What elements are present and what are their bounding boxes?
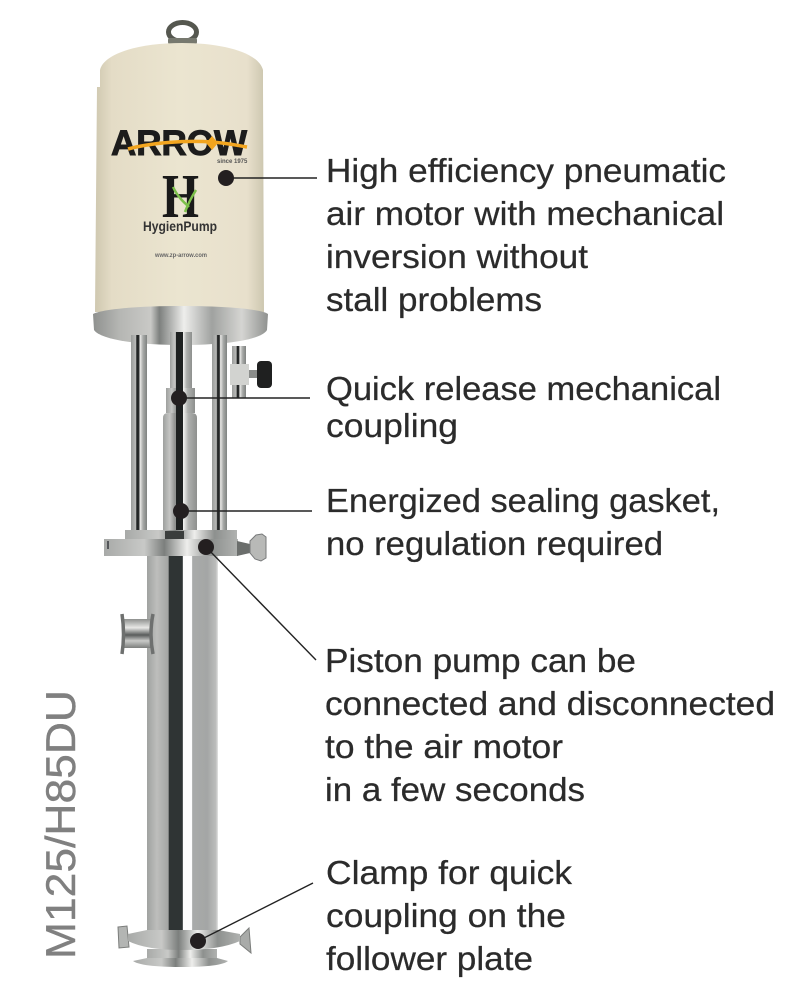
leader lines and dots [171,170,317,949]
callout: piston pump: Piston pump can be [325,642,636,679]
lifting eyelet [168,22,197,44]
callout: piston pump: to the air motor [325,728,563,765]
callout: coupling [326,370,721,444]
logo: Arrow: since 1975 [217,159,248,165]
logo: HygienPump [143,163,217,259]
valve and knob [230,346,272,398]
tie rods [131,335,227,531]
callout: gasket [326,482,720,562]
model name: M125/H85DU [37,690,84,959]
callout: air motor [326,152,726,318]
logo: HygienPump: www.zp-arrow.com [154,253,207,259]
air motor cylinder [95,43,264,312]
callout: air motor: stall problems [326,281,542,318]
side port [122,614,153,654]
motor base ring [93,306,268,345]
clamp flange [104,534,266,561]
callout: clamp [326,854,573,977]
logo: HygienPump: H [162,163,199,231]
upper plate [125,530,237,540]
coupling and piston rod [163,332,197,531]
callout: piston pump [325,642,775,808]
callout: clamp: Clamp for quick [326,854,573,891]
main pump tube [147,555,218,934]
logo: Arrow: ARROW [111,124,247,163]
callout: air motor: High efficiency pneumatic [326,152,726,189]
callout: piston pump: in a few seconds [325,771,585,808]
logo: HygienPump: HygienPump [143,218,217,234]
callout: air motor: air motor with mechanical [326,195,724,232]
callout: clamp: coupling on the [326,897,566,934]
callout: gasket: no regulation required [326,525,663,562]
callout: coupling: Quick release mechanical [326,370,721,407]
callout: air motor: inversion without [326,238,588,275]
bottom clamp [118,926,251,967]
callout: gasket: Energized sealing gasket, [326,482,720,519]
callout: coupling: coupling [326,407,458,444]
callout: clamp: follower plate [326,940,533,977]
callout: piston pump: connected and disconnected [325,685,775,722]
product photo: pump assembly [93,22,272,967]
